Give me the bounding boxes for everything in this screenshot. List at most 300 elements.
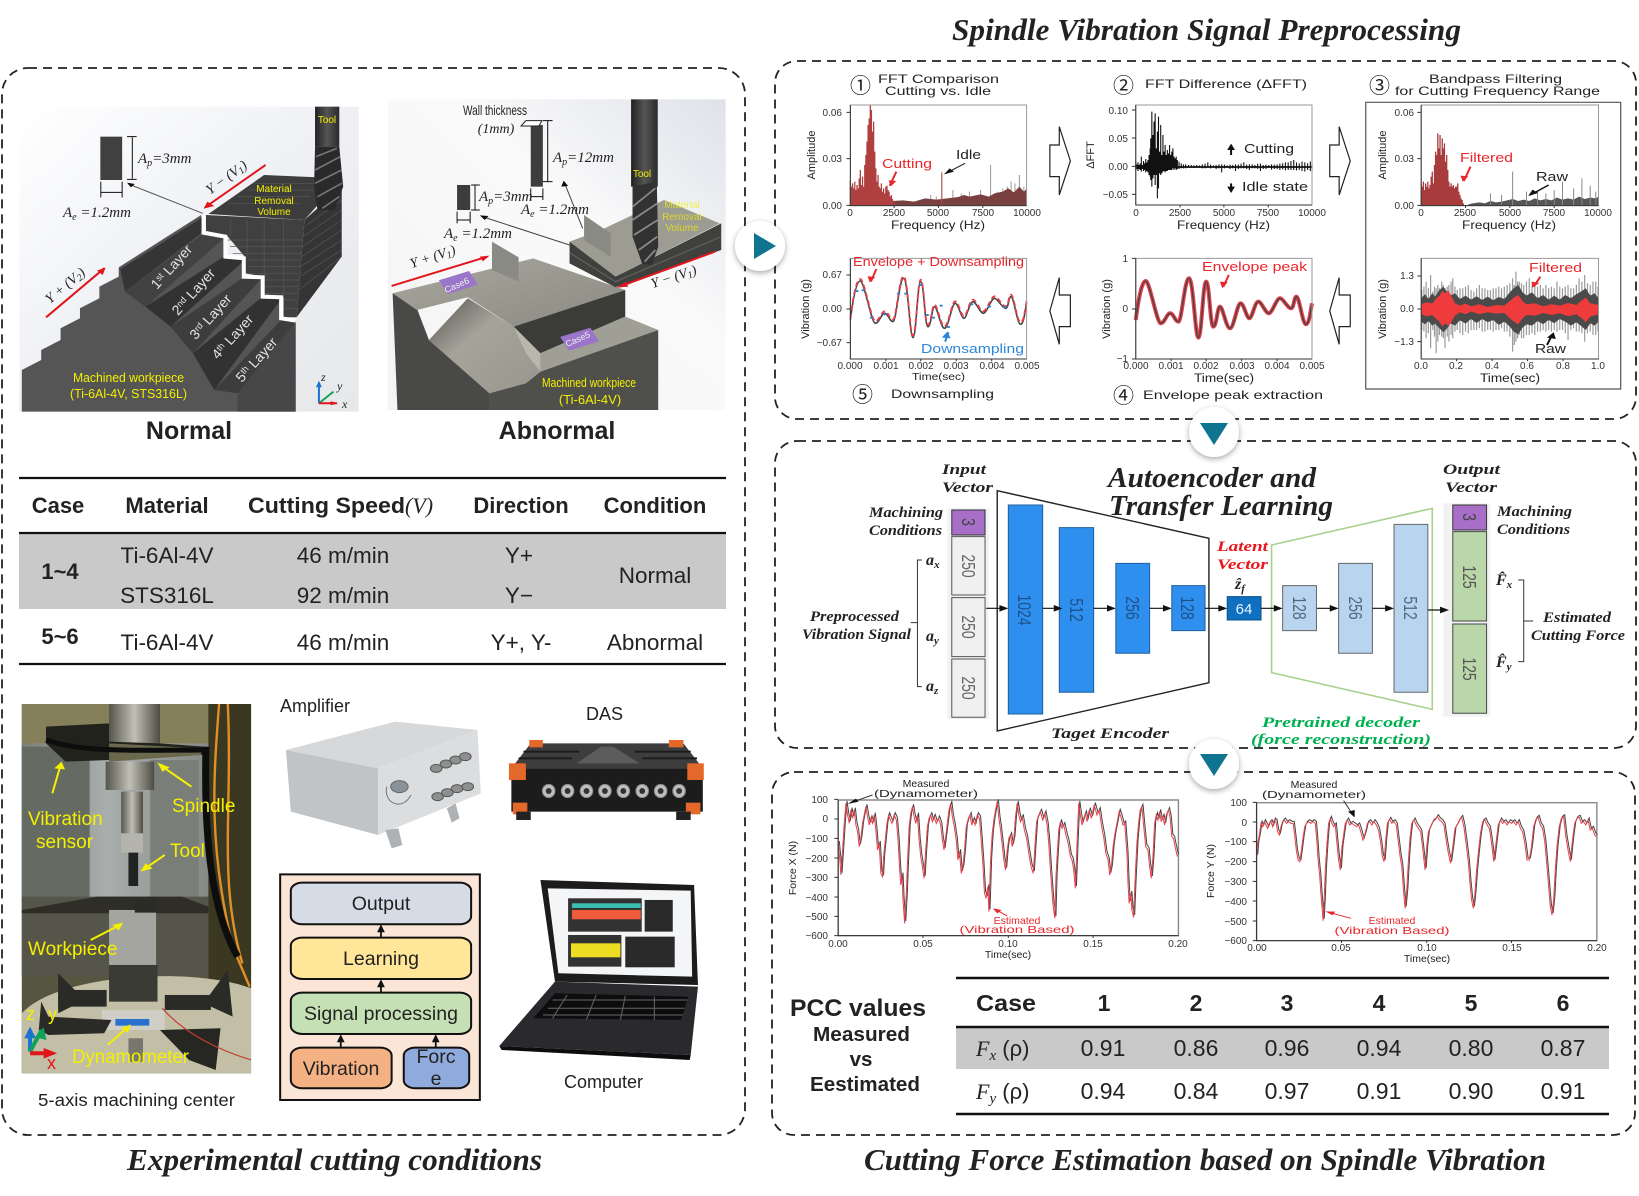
table: PCC values: 0.91 <box>1357 1078 1401 1104</box>
table: PCC values: 0.84 <box>1174 1078 1219 1104</box>
chart: bandpass filtered spectrum: 0.06 <box>1395 108 1414 119</box>
layer size labels: 125 <box>1459 657 1479 681</box>
table: PCC values: y <box>987 1091 996 1107</box>
chart: FFT difference: 0.10 <box>1109 106 1128 117</box>
chart: envelope peak: Envelope peak <box>1202 260 1308 274</box>
table: cutting conditions: Y+ <box>505 543 533 568</box>
image: normal stair-step milling: Machined workpiece <box>73 370 184 385</box>
chart: FFT difference: 5000 <box>1213 208 1236 219</box>
chart: bandpass filtered signal: 0.6 <box>1520 361 1534 372</box>
chart: force X: (Vibration Based) <box>960 924 1074 936</box>
icon: play button arrow <box>735 221 785 271</box>
table: PCC values: Case <box>976 990 1036 1016</box>
image: abnormal wall milling: p <box>487 196 493 207</box>
chart: FFT comparison: 0.03 <box>823 154 842 165</box>
chart: force Y: 0.05 <box>1331 943 1351 954</box>
table: cutting conditions: 46 m/min <box>297 543 389 568</box>
image: normal stair-step milling: Layer <box>197 291 235 331</box>
chart: downsampling: −0.67 <box>817 338 842 349</box>
step 3 heading: bandpass filtering: for Cutting Frequency Range <box>1395 84 1600 98</box>
chart: FFT comparison <box>806 105 1041 232</box>
chart: bandpass filtered signal: 0.0 <box>1400 304 1414 315</box>
chart: envelope peak: Vibration (g) <box>1101 279 1113 339</box>
diagram: processing flow: e <box>431 1068 441 1090</box>
table: PCC values <box>956 978 1609 1114</box>
chart: force Y <box>1205 779 1607 965</box>
chart: force X: 0.00 <box>828 939 848 950</box>
chart: envelope peak: 1 <box>1122 254 1128 265</box>
diagram: processing flow <box>280 874 480 1100</box>
chart: envelope peak: 0.001 <box>1158 361 1184 372</box>
image: normal stair-step milling: A <box>138 151 147 167</box>
chart: bandpass filtered signal <box>1377 258 1605 385</box>
annotation labels: Conditions <box>869 523 942 539</box>
image: amplifier <box>286 722 481 848</box>
chart: bandpass filtered signal: −1.3 <box>1394 337 1414 348</box>
image: normal stair-step milling: y <box>336 379 343 393</box>
annotation labels: a <box>926 628 934 645</box>
chart frame: bandpass box <box>1366 102 1621 389</box>
table: cutting conditions: Normal <box>619 563 691 588</box>
chart: FFT difference: ΔFFT <box>1085 141 1097 169</box>
annotation labels: Preprocessed <box>810 609 900 625</box>
table: PCC values: 3 <box>1281 990 1293 1016</box>
text block: PCC values: Eestimated <box>810 1073 920 1096</box>
layer size labels: 512 <box>1400 596 1420 620</box>
image: normal stair-step milling: th <box>238 364 251 376</box>
table: cutting conditions: Condition <box>604 493 706 518</box>
chart: force X: (Dynamometer) <box>874 788 978 800</box>
table: cutting conditions: Y− <box>505 583 533 608</box>
chart: force Y: −600 <box>1224 936 1247 947</box>
chart: envelope peak: −1 <box>1117 354 1128 365</box>
image: normal stair-step milling: 1 <box>237 165 247 177</box>
table: cutting conditions <box>19 478 726 664</box>
image: abnormal wall milling: ) <box>689 263 699 279</box>
image: normal stair-step milling: 1 <box>147 275 164 292</box>
image: normal stair-step milling: Y − (V <box>203 164 243 198</box>
image: normal stair-step milling: Y + (V <box>43 272 81 307</box>
chart: envelope peak: 0.005 <box>1299 361 1325 372</box>
table: PCC values: 0.91 <box>1541 1078 1585 1104</box>
annotation labels: F̂ <box>1496 572 1507 589</box>
chart: FFT comparison: Cutting <box>882 157 932 171</box>
table: cutting conditions: STS316L <box>120 583 214 608</box>
icon: down arrow one <box>1189 407 1239 457</box>
chart: FFT comparison: 0.00 <box>823 201 842 212</box>
chart: downsampling: 0.005 <box>1014 361 1040 372</box>
chart: bandpass filtered spectrum: Raw <box>1536 170 1569 184</box>
image: abnormal wall milling: ) <box>448 243 458 259</box>
chart: force Y: −500 <box>1224 917 1247 928</box>
chart: force Y: −200 <box>1224 857 1247 868</box>
caption: amplifier: Amplifier <box>280 696 350 716</box>
diagram: processing flow: Signal processing <box>304 1003 458 1025</box>
chart: force Y: 0.00 <box>1247 943 1267 954</box>
chart: force Y: (Dynamometer) <box>1262 789 1366 801</box>
chart: downsampling: 0.001 <box>873 361 899 372</box>
chart: FFT comparison: 0.06 <box>823 108 842 119</box>
annotation labels: Latent <box>1216 539 1269 555</box>
table: PCC values: 1 <box>1098 990 1111 1016</box>
image: normal stair-step milling: A <box>63 205 72 221</box>
chart: bandpass filtered spectrum: 0.03 <box>1395 154 1414 165</box>
table: cutting conditions: 1~4 <box>41 559 79 584</box>
caption: computer: Computer <box>564 1072 643 1092</box>
chart: force Y: (Vibration Based) <box>1334 925 1450 937</box>
table: cutting conditions: Abnormal <box>607 630 703 655</box>
layer size labels <box>958 513 1479 700</box>
image: abnormal wall milling: Y − (V <box>649 266 689 292</box>
annotation labels: Output <box>1443 462 1501 478</box>
diagram: processing flow: Forc <box>416 1046 456 1068</box>
layer size labels: 1024 <box>1014 594 1034 626</box>
panel: signal preprocessing <box>775 61 1636 419</box>
photo: 5-axis machining center: Tool <box>170 841 205 862</box>
image: laptop computer <box>499 880 698 1060</box>
image: abnormal wall milling: =3mm <box>493 189 533 205</box>
chart: downsampling: Vibration (g) <box>800 279 812 339</box>
chart: force X: Estimated <box>994 915 1041 927</box>
chart: envelope peak: 0 <box>1122 304 1128 315</box>
image: normal stair-step milling: (Ti-6Al-4V, STS316L) <box>70 386 187 401</box>
photo: 5-axis machining center: z <box>26 1004 35 1024</box>
layer size labels: 128 <box>1289 596 1309 620</box>
chart: force Y: 0 <box>1241 818 1247 829</box>
image: abnormal wall milling: 1 <box>445 249 454 261</box>
chart: bandpass filtered signal: 1.3 <box>1400 271 1414 282</box>
image: abnormal wall milling: Wall thickness <box>463 102 527 118</box>
image: abnormal wall milling: =12mm <box>567 150 614 166</box>
table: PCC values: 0.94 <box>1357 1035 1402 1061</box>
image: abnormal wall milling: A <box>444 226 453 242</box>
image: normal stair-step milling: Tool <box>318 115 336 126</box>
network shapes <box>911 491 1533 731</box>
table: cutting conditions: 46 m/min <box>297 630 389 655</box>
table: cutting conditions: 92 m/min <box>297 583 389 608</box>
chart: FFT comparison: 5000 <box>927 208 950 219</box>
image: normal stair-step milling: x <box>341 397 348 411</box>
annotation labels: Machining <box>1496 504 1573 520</box>
title: cutting force estimation: Cutting Force Estimation based on Spindle Vibration <box>864 1142 1546 1177</box>
table: cutting conditions: (V) <box>405 493 433 518</box>
title: autoencoder and transfer learning <box>1106 462 1333 522</box>
chart: force X: −500 <box>805 912 828 923</box>
table: cutting conditions: Material <box>125 493 209 518</box>
chart: FFT difference: Idle state <box>1242 180 1308 194</box>
text block: PCC values: Measured <box>813 1023 910 1046</box>
annotation labels: y <box>1505 661 1512 673</box>
chart: downsampling: 0.00 <box>823 304 842 315</box>
chart: bandpass filtered signal: Vibration (g) <box>1377 279 1389 339</box>
annotation labels: Conditions <box>1497 522 1570 538</box>
chart: bandpass filtered spectrum: 2500 <box>1454 208 1477 219</box>
annotation labels: Taget Encoder <box>1051 726 1169 742</box>
step 3 heading: bandpass filtering: ③ <box>1369 70 1390 100</box>
annotation labels: a <box>926 678 934 695</box>
chart: FFT difference: 0 <box>1133 208 1139 219</box>
chart: force X: 0 <box>822 814 828 825</box>
chart: force X: 0.15 <box>1083 939 1103 950</box>
chart: bandpass filtered signal: Filtered <box>1529 261 1582 275</box>
step 4 heading: envelope peak extraction: ④ <box>1113 380 1134 410</box>
chart: FFT difference: 0.00 <box>1109 162 1128 173</box>
image: normal stair-step milling: 4 <box>208 346 225 362</box>
image: abnormal wall milling: (Ti-6Al-4V) <box>559 392 621 407</box>
chart: downsampling: 0.004 <box>979 361 1005 372</box>
heading: normal: Normal <box>146 417 232 445</box>
layer size labels: 128 <box>1177 596 1197 620</box>
image: normal stair-step milling: nd <box>174 295 188 309</box>
photo: 5-axis machining center <box>22 704 251 1073</box>
chart: force Y: Force Y (N) <box>1205 844 1217 898</box>
image: abnormal wall milling: Machined workpiece <box>542 375 636 390</box>
chart: force Y: Time(sec) <box>1404 953 1450 965</box>
image: normal stair-step milling: Layer <box>180 265 218 305</box>
table: cutting conditions: 5~6 <box>41 624 79 649</box>
image: normal stair-step milling: Removal <box>254 196 294 207</box>
chart: FFT comparison: 0 <box>847 208 853 219</box>
table: PCC values: (ρ) <box>996 1036 1029 1061</box>
chart: force X: Measured <box>903 778 950 790</box>
image: abnormal wall milling: e <box>530 209 535 220</box>
diagram: processing flow: Vibration <box>303 1058 379 1080</box>
image: normal stair-step milling: 2 <box>168 302 185 318</box>
table: PCC values: 0.87 <box>1541 1035 1585 1061</box>
image: abnormal wall milling: p <box>561 157 567 168</box>
chart: FFT comparison: Amplitude <box>806 131 818 179</box>
caption: 5-axis machining center: 5-axis machining center <box>38 1090 235 1110</box>
chart: force X: −600 <box>805 931 828 942</box>
table: PCC values: 0.86 <box>1174 1035 1218 1061</box>
step 1 heading: FFT comparison <box>850 70 999 100</box>
chart: force X: 0.10 <box>998 939 1018 950</box>
step 2 heading: FFT difference: FFT Difference (ΔFFT) <box>1145 77 1307 91</box>
image: normal stair-step milling: Material <box>256 184 292 195</box>
image: abnormal wall milling: =1.2mm <box>535 202 589 218</box>
step 4 heading: envelope peak extraction <box>1113 380 1323 410</box>
title: autoencoder and transfer learning: Transfer Learning <box>1109 490 1333 522</box>
diagram: processing flow: Learning <box>343 948 419 970</box>
chart: downsampling: 0.000 <box>837 361 863 372</box>
annotation labels: Vector <box>1217 557 1268 573</box>
image: normal stair-step milling: th <box>214 341 227 353</box>
annotation labels: Cutting Force <box>1531 628 1625 644</box>
chart: force X <box>787 778 1188 961</box>
chart: downsampling <box>800 255 1040 383</box>
chart: bandpass filtered signal: 0.0 <box>1414 361 1428 372</box>
chart: envelope peak <box>1101 254 1325 385</box>
chart: FFT difference: 7500 <box>1257 208 1280 219</box>
step 5 heading: downsampling: ⑤ <box>852 379 873 409</box>
photo: 5-axis machining center: Workpiece <box>28 939 117 960</box>
table: PCC values: 2 <box>1190 990 1202 1016</box>
annotation labels: Vibration Signal <box>802 627 912 643</box>
annotation labels: z <box>933 685 939 697</box>
annotation labels: Estimated <box>1542 610 1612 626</box>
chart: bandpass filtered spectrum: 0.00 <box>1395 201 1414 212</box>
panel: autoencoder and transfer learning <box>775 441 1636 748</box>
image: abnormal wall milling: Volume <box>665 223 699 234</box>
layer size labels: 3 <box>1459 513 1479 521</box>
annotation labels: f <box>1241 583 1246 595</box>
chart: envelope peak: 0.004 <box>1264 361 1290 372</box>
step 4 heading: envelope peak extraction: Envelope peak extraction <box>1143 388 1323 402</box>
chart: bandpass filtered signal: 0.4 <box>1485 361 1499 372</box>
table: cutting conditions: Direction <box>473 493 569 518</box>
chart: envelope peak: 0.002 <box>1193 361 1219 372</box>
image: abnormal wall milling: A <box>521 202 530 218</box>
image: normal stair-step milling: Layer <box>218 311 257 351</box>
text block: PCC values: vs <box>850 1048 872 1071</box>
step 1 heading: FFT comparison: Cutting vs. Idle <box>885 84 991 98</box>
chart: force X: Force X (N) <box>787 841 799 895</box>
chart: force Y: −100 <box>1224 837 1247 848</box>
table: PCC values: 0.94 <box>1081 1078 1126 1104</box>
image: normal stair-step milling: 3 <box>186 326 203 342</box>
heading: abnormal: Abnormal <box>499 417 615 445</box>
annotation labels: a <box>926 552 934 569</box>
icon: down arrow two <box>1189 739 1239 789</box>
table: PCC values: 4 <box>1373 990 1386 1016</box>
chart: FFT difference <box>1085 105 1326 232</box>
layer size labels: 512 <box>1066 598 1086 622</box>
chart: force X: −400 <box>805 893 828 904</box>
text block: PCC values <box>790 995 926 1096</box>
image: abnormal wall milling: Tool <box>633 169 651 180</box>
text block: PCC values: PCC values <box>790 995 926 1022</box>
chart: downsampling: Time(sec) <box>912 371 965 383</box>
annotation labels: x <box>933 559 940 571</box>
chart: FFT difference: −0.05 <box>1103 190 1128 201</box>
chart: bandpass filtered spectrum: 10000 <box>1584 208 1612 219</box>
chart: downsampling: 0.003 <box>943 361 969 372</box>
image: abnormal wall milling: A <box>479 189 488 205</box>
image: abnormal wall milling: 1 <box>686 269 695 281</box>
image: normal stair-step milling: Layer <box>157 241 195 281</box>
chart: FFT difference: Frequency (Hz) <box>1177 218 1270 232</box>
annotation labels: F̂ <box>1496 654 1507 671</box>
chart: FFT difference: 2500 <box>1169 208 1192 219</box>
table: PCC values: F <box>975 1036 990 1061</box>
layer size labels: 256 <box>1122 596 1142 620</box>
image: normal stair-step milling: 2 <box>75 272 86 284</box>
diagram: processing flow: Output <box>352 893 411 915</box>
chart: force Y: 0.20 <box>1587 943 1607 954</box>
step 2 heading: FFT difference <box>1113 70 1307 100</box>
photo: 5-axis machining center: x <box>47 1053 56 1073</box>
image: normal stair-step milling: z <box>320 370 326 384</box>
image: abnormal wall milling <box>388 99 726 410</box>
chart: downsampling: 0.67 <box>823 270 842 281</box>
step 2 heading: FFT difference: ② <box>1113 70 1134 100</box>
title: autoencoder and transfer learning: Autoencoder and <box>1106 462 1317 494</box>
chart: FFT comparison: 2500 <box>883 208 906 219</box>
layer size labels: 125 <box>1459 565 1479 589</box>
chart: force X: −300 <box>805 873 828 884</box>
chart: bandpass filtered signal: 1.0 <box>1591 361 1605 372</box>
step 1 heading: FFT comparison: FFT Comparison <box>878 72 999 86</box>
table: cutting conditions: Cutting Speed <box>248 493 405 518</box>
table: PCC values: 0.97 <box>1265 1078 1309 1104</box>
chart: bandpass filtered signal: Raw <box>1535 342 1567 356</box>
image: normal stair-step milling: Volume <box>257 207 291 218</box>
image: abnormal wall milling: Case6 <box>443 275 471 295</box>
step 5 heading: downsampling <box>852 379 994 409</box>
chart: force X: 100 <box>811 795 828 806</box>
layer size labels: 3 <box>958 518 978 526</box>
table: cutting conditions: Ti-6Al-4V <box>121 630 213 655</box>
image: normal stair-step milling <box>19 107 359 412</box>
layer size labels: 250 <box>958 554 978 578</box>
table: cutting conditions: Y+, Y- <box>491 630 551 655</box>
image: normal stair-step milling: rd <box>192 321 205 333</box>
annotation labels: Vector <box>942 480 993 496</box>
panel: cutting force estimation <box>772 772 1635 1135</box>
image: abnormal wall milling: e <box>453 233 458 244</box>
chart: force Y: Estimated <box>1369 915 1416 927</box>
image: abnormal wall milling: Y + (V <box>408 246 448 272</box>
chart: force X: −200 <box>805 854 828 865</box>
photo: 5-axis machining center: sensor <box>36 832 94 853</box>
chart: FFT difference: 0.05 <box>1109 134 1128 145</box>
chart: bandpass filtered signal: 0.2 <box>1449 361 1463 372</box>
annotation labels: Input <box>941 462 987 478</box>
table: PCC values: 0.80 <box>1449 1035 1493 1061</box>
annotation labels: Pretrained decoder <box>1262 715 1420 731</box>
step 3 heading: bandpass filtering <box>1369 70 1600 100</box>
image: abnormal wall milling: (1mm) <box>478 122 515 137</box>
photo: 5-axis machining center: y <box>48 1004 57 1024</box>
image: abnormal wall milling: =1.2mm <box>458 226 512 242</box>
image: normal stair-step milling: Layer <box>242 334 281 374</box>
chart: bandpass filtered signal: Time(sec) <box>1480 373 1540 385</box>
table: cutting conditions: Case <box>32 493 84 518</box>
chart: bandpass filtered spectrum: Frequency (Hz) <box>1462 218 1556 232</box>
chart: bandpass filtered spectrum: 5000 <box>1499 208 1522 219</box>
annotation labels: Vector <box>1445 480 1497 496</box>
image: abnormal wall milling: Case5 <box>564 329 592 349</box>
chart: force X: −100 <box>805 834 828 845</box>
annotation labels: Machining <box>868 505 944 521</box>
annotation labels <box>802 462 1625 748</box>
image: normal stair-step milling: ) <box>75 265 89 281</box>
chart: bandpass filtered spectrum: 7500 <box>1543 208 1566 219</box>
title: experimental cutting conditions: Experimental cutting conditions <box>126 1142 542 1177</box>
annotation labels: x <box>1506 579 1513 591</box>
image: normal stair-step milling: st <box>153 271 166 283</box>
chart: downsampling: Downsampling <box>921 342 1024 356</box>
chart: envelope peak: 0.000 <box>1123 361 1149 372</box>
chart: FFT comparison: 10000 <box>1013 208 1041 219</box>
chart: FFT difference: 10000 <box>1298 208 1326 219</box>
chart: FFT comparison: Idle <box>956 148 981 162</box>
chart: bandpass filtered spectrum <box>1377 105 1612 232</box>
chart: force Y: Measured <box>1291 779 1338 791</box>
chart: force Y: 0.10 <box>1417 943 1437 954</box>
photo: 5-axis machining center: Spindle <box>172 796 235 817</box>
chart: FFT comparison: Frequency (Hz) <box>891 218 985 232</box>
annotation labels: (force reconstruction) <box>1251 732 1431 748</box>
table: cutting conditions: Ti-6Al-4V <box>121 543 213 568</box>
image: normal stair-step milling: 5 <box>232 369 249 385</box>
image: normal stair-step milling: =1.2mm <box>77 205 131 221</box>
chart: force X: 0.20 <box>1168 939 1188 950</box>
image: data acquisition system <box>509 740 704 820</box>
arrows: block arrows between steps <box>1050 127 1350 344</box>
layer size labels: 256 <box>1345 596 1365 620</box>
photo: 5-axis machining center: Vibration <box>28 809 103 830</box>
